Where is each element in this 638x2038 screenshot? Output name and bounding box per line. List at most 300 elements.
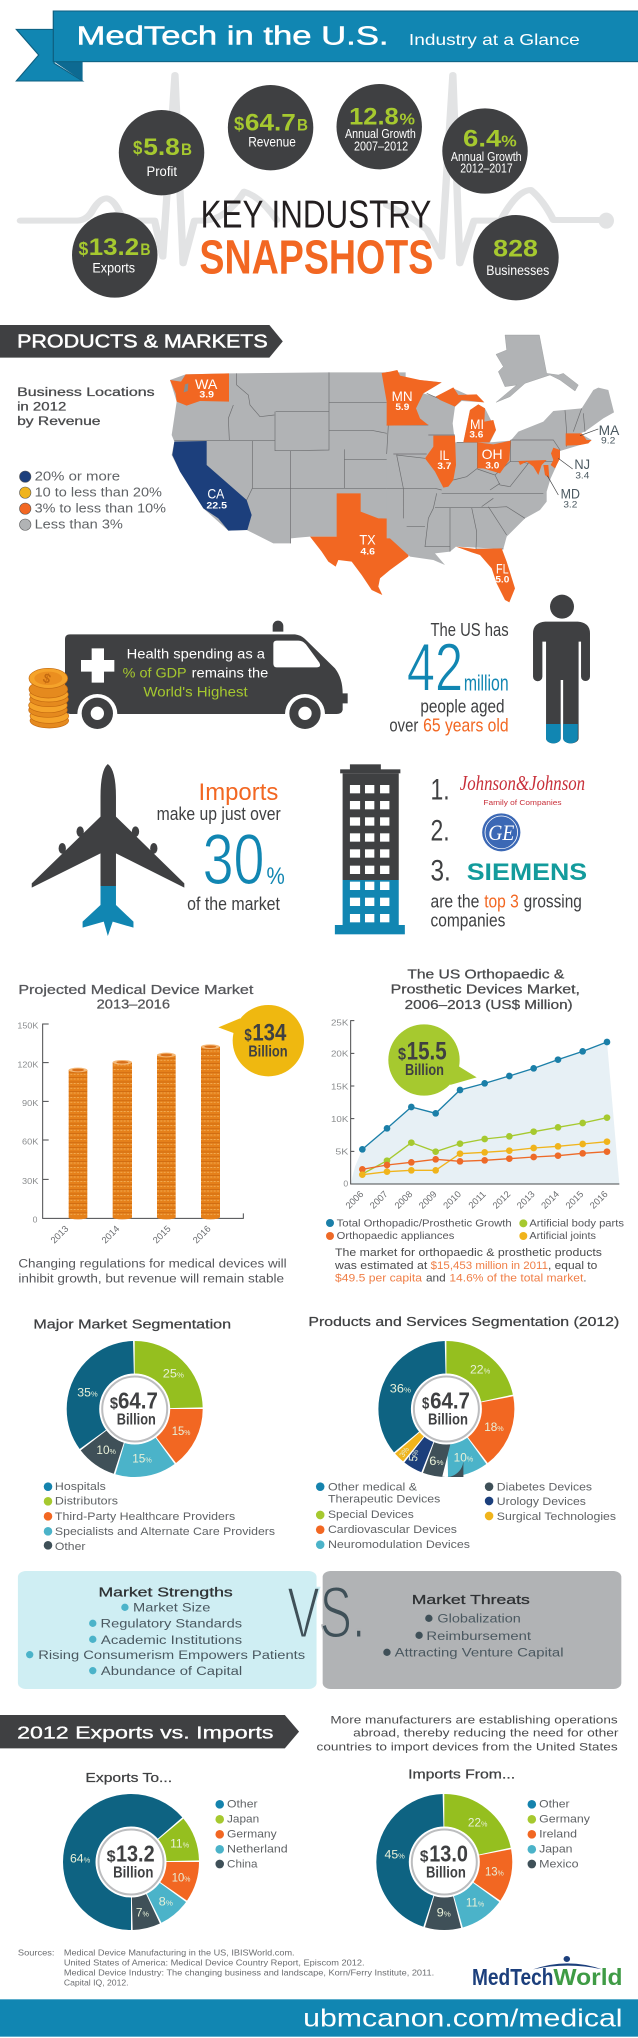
legend: imports	[528, 1798, 590, 1870]
series: artificial joints	[362, 1138, 610, 1175]
callout state labels: MA	[599, 422, 620, 438]
eastern state labels: 5.9	[395, 402, 409, 412]
stat: annual growth 2012-2017: 6.4	[463, 125, 501, 152]
y axis labels: 30K	[22, 1176, 39, 1186]
chart title: Prosthetic Devices Market,	[391, 982, 580, 996]
stat: revenue: B	[297, 115, 308, 134]
state: maryland	[518, 460, 549, 478]
donut: major market segmentation	[84, 1358, 186, 1460]
icon: ambulance with coins	[29, 621, 348, 729]
stat: exports: B	[140, 240, 151, 259]
versus label: S.	[320, 1573, 365, 1653]
percent labels: left donut: 15%	[172, 1424, 190, 1438]
stat: profit	[119, 110, 204, 195]
donut value: left	[110, 1389, 158, 1428]
chart description: The market for orthopaedic & prosthetic products	[335, 1247, 603, 1259]
percent labels: imports donut: 22%	[468, 1816, 487, 1829]
eastern state labels	[392, 388, 509, 585]
sources	[18, 1948, 434, 1987]
chart description	[334, 1247, 603, 1285]
percent labels: imports donut	[385, 1816, 504, 1919]
state: florida	[456, 547, 515, 602]
percent labels: right donut: 22%	[470, 1363, 490, 1376]
percent labels: imports donut: 11%	[466, 1896, 484, 1909]
section heading: PRODUCTS & MARKETS	[17, 332, 268, 352]
eastern state labels: IL	[439, 447, 450, 463]
chart description: and	[426, 1273, 446, 1285]
stat: annual growth 2012-2017: 2012–2017	[460, 161, 513, 175]
eastern state labels: 3.0	[485, 460, 499, 470]
logo: johnson and johnson	[460, 771, 585, 807]
x axis labels: 2009	[417, 1189, 439, 1211]
panel: market strengths: Academic Institutions	[101, 1633, 242, 1647]
map legend: 10 to less than 20%	[35, 485, 162, 499]
fact: imports 30 percent: Imports	[199, 778, 278, 805]
donut value: right: $	[422, 1395, 430, 1412]
callout: 15.5 billion	[388, 1024, 477, 1096]
donut segments	[80, 1811, 182, 1913]
heading: snapshots: SNAPSHOTS	[199, 230, 433, 284]
donut value: exports	[107, 1842, 155, 1881]
x axis labels: 2014	[539, 1189, 561, 1211]
percent labels: exports donut: 8%	[159, 1895, 173, 1908]
y axis labels: 5K	[335, 1147, 349, 1157]
state: texas	[310, 493, 410, 595]
y axis labels	[17, 1021, 39, 1225]
eastern states	[387, 372, 614, 565]
section: infographic facts	[32, 620, 590, 936]
eastern state labels: 3.7	[437, 461, 451, 471]
map legend	[20, 469, 166, 531]
y axis labels: 20K	[331, 1049, 349, 1059]
callout: 134 billion: $	[244, 1026, 252, 1045]
fact: imports 30 percent: 30	[203, 819, 264, 899]
heartbeat end dot	[599, 213, 614, 229]
eastern state labels: FL	[496, 560, 509, 576]
stat: exports: 13.2	[89, 233, 139, 260]
legend: right donut: Surgical Technologies	[497, 1510, 616, 1523]
donut value: right: 64.7	[430, 1389, 470, 1414]
legend: left donut: Third-Party Healthcare Providers	[55, 1510, 235, 1523]
list: top three companies: companies	[430, 911, 505, 931]
chart description: $15,453 million in 2011	[431, 1260, 548, 1272]
state: new jersey	[551, 448, 560, 468]
legend: exports: Germany	[227, 1828, 277, 1840]
percent labels: exports donut: 11%	[170, 1837, 189, 1850]
list: top three companies: 1.	[430, 773, 450, 807]
percent labels: right donut: 6%	[429, 1454, 444, 1468]
section description: abroad, thereby reducing the need for other	[353, 1727, 618, 1739]
x axis labels: 2010	[441, 1189, 463, 1211]
callout state labels: NJ	[574, 456, 590, 472]
legend: right donut: Neuromodulation Devices	[328, 1538, 470, 1551]
map title: in 2012	[17, 400, 66, 413]
eastern state labels: OH	[482, 446, 503, 462]
panel: market threats: Attracting Venture Capital	[395, 1646, 564, 1659]
list: top three companies: 2.	[430, 815, 450, 848]
series: total growth	[359, 1039, 610, 1153]
chart caption: inhibit growth, but revenue will remain stable	[18, 1271, 284, 1285]
section: exports vs imports text	[0, 1713, 638, 2037]
stat: businesses: 828	[493, 235, 538, 262]
callout: 15.5 billion: $	[398, 1044, 407, 1063]
map legend: Less than 3%	[35, 517, 123, 531]
icon: airplane	[32, 764, 184, 936]
stat: revenue	[228, 85, 313, 170]
fact: 42 million seniors: 65 years old	[423, 716, 509, 736]
panel: market threats: Globalization	[437, 1612, 521, 1625]
western state labels: TX	[359, 531, 376, 547]
western state labels: CA	[207, 485, 225, 501]
legend: right donut: Therapeutic Devices	[328, 1493, 440, 1505]
list: top three companies	[430, 773, 582, 931]
percent labels: imports donut: 9%	[437, 1906, 451, 1919]
section description: More manufacturers are establishing operations	[330, 1713, 618, 1726]
banner	[53, 11, 638, 62]
percent labels: right donut: 10%	[454, 1451, 473, 1464]
section: strengths vs threats	[18, 1571, 621, 1689]
chart legend: Artificial joints	[529, 1231, 596, 1242]
x axis labels: 2015	[564, 1189, 585, 1211]
map legend: 20% or more	[35, 469, 120, 483]
legend: left donut: Distributors	[55, 1495, 118, 1507]
eastern state labels: MN	[392, 388, 413, 404]
fact: imports 30 percent	[157, 778, 285, 914]
section banner	[0, 325, 283, 358]
legend: imports: Ireland	[539, 1828, 577, 1840]
stat: annual growth 2012-2017: Annual Growth	[451, 149, 522, 164]
chart title: The US Orthopaedic &	[407, 967, 565, 981]
legend: right donut: Other medical &	[328, 1481, 417, 1493]
stat: profit: Profit	[146, 164, 178, 180]
state: minnesota	[382, 370, 442, 426]
percent labels: exports donut	[70, 1837, 190, 1919]
western state labels: 22.5	[206, 500, 227, 510]
list: top three companies: grossing	[524, 892, 582, 912]
callout state labels: 3.4	[575, 470, 589, 480]
y axis labels: 0	[33, 1215, 38, 1225]
heading: imports from: Imports From...	[408, 1767, 515, 1781]
ambulance text: Health spending as a	[127, 645, 265, 661]
series: orthopaedic appliances	[359, 1148, 610, 1178]
percent labels: right donut: 18%	[484, 1420, 504, 1434]
list: top three companies: top 3	[484, 892, 519, 912]
fact: 42 million seniors: million	[464, 672, 509, 696]
panel: market strengths: Market Strengths	[98, 1586, 233, 1600]
stat: businesses	[473, 215, 559, 300]
title: MedTech in the U.S.	[76, 22, 389, 51]
x axis labels: 2016	[588, 1189, 610, 1211]
legend: exports: Other	[227, 1798, 258, 1810]
stat: profit: B	[181, 140, 192, 159]
chart caption: Changing regulations for medical devices will	[18, 1256, 287, 1270]
medical cross	[81, 648, 114, 683]
chart title: 2006–2013 (US$ Million)	[405, 998, 573, 1012]
legend: right donut: Cardiovascular Devices	[328, 1523, 457, 1536]
legend: exports: China	[227, 1858, 258, 1870]
legend: left donut	[44, 1480, 275, 1553]
percent labels: right donut: 5%	[407, 1449, 422, 1462]
chart legend: Orthopaedic appliances	[337, 1231, 454, 1242]
state: washington	[170, 373, 229, 406]
ambulance body	[65, 634, 348, 714]
panel: market threats: Market Threats	[412, 1593, 530, 1608]
percent labels: right donut: 36%	[390, 1382, 411, 1395]
percent labels: exports donut: 10%	[172, 1871, 190, 1884]
western state labels: WA	[195, 376, 218, 392]
donut center	[96, 1826, 166, 1898]
heading: key industry: KEY INDUSTRY	[201, 194, 431, 237]
state: alaska	[496, 335, 578, 402]
panel: market threats	[323, 1571, 621, 1689]
x axis labels: 2013	[515, 1189, 537, 1211]
chart description: .	[583, 1273, 586, 1285]
y axis labels: 90K	[22, 1098, 39, 1108]
stat: annual growth 2007-2012: %	[400, 111, 415, 128]
state: california	[172, 441, 252, 531]
icon: person	[533, 622, 590, 743]
callout: 134 billion	[218, 1005, 304, 1076]
map: west	[170, 372, 410, 595]
percent labels: imports donut: 45%	[385, 1848, 405, 1861]
section description: countries to import devices from the United States	[317, 1741, 618, 1753]
chart: orthopaedic and prosthetic devices market	[326, 967, 624, 1285]
map title: by Revenue	[17, 414, 101, 428]
chart description: $49.5 per capita	[335, 1273, 423, 1285]
donut value: left: $	[110, 1395, 118, 1412]
series: artificial body parts	[362, 1114, 610, 1174]
panel: market threats: Reimbursement	[426, 1629, 531, 1643]
section description	[317, 1713, 618, 1753]
panel: market strengths	[18, 1571, 317, 1689]
ribbon fold	[54, 62, 83, 81]
donut segments	[395, 1358, 497, 1460]
callout: 134 billion: 134	[252, 1020, 287, 1047]
axes	[351, 1021, 619, 1184]
callout state labels: 3.2	[563, 500, 577, 510]
chart title: Projected Medical Device Market	[18, 983, 254, 997]
donut: exports	[80, 1811, 182, 1913]
y axis labels: 15K	[331, 1081, 349, 1091]
section: segmentation text	[33, 1314, 619, 1553]
sources: Medical Device Manufacturing in the US, IBISWorld.com.	[64, 1948, 295, 1957]
section heading: 2012 Exports vs. Imports	[17, 1723, 273, 1743]
section banner	[0, 1715, 299, 1748]
x axis labels: 2006	[344, 1189, 365, 1211]
logo: medtechworld	[472, 1956, 623, 1990]
stat: exports: $	[79, 239, 89, 259]
eastern state labels: MI	[470, 416, 484, 432]
chart caption	[18, 1256, 287, 1285]
stat: revenue: 64.7	[245, 109, 296, 136]
x axis labels: 2011	[467, 1189, 488, 1211]
legend: left donut: Hospitals	[55, 1480, 106, 1493]
coin bars	[69, 1044, 220, 1219]
fact: 42 million seniors: over	[389, 716, 418, 736]
heading: products and services: Products and Services Segmentation (2012)	[308, 1314, 619, 1329]
axes	[43, 1024, 243, 1218]
panel: market strengths: Abundance of Capital	[101, 1664, 242, 1678]
map: east and alaska	[382, 335, 620, 619]
donut segments	[84, 1358, 186, 1460]
donut value: exports: Billion	[113, 1864, 153, 1881]
ambulance text: World's Highest	[143, 684, 248, 700]
chart description: was estimated at	[334, 1260, 427, 1272]
donut value: left: Billion	[117, 1411, 156, 1428]
donut center	[411, 1374, 482, 1444]
callout: 15.5 billion: 15.5	[407, 1038, 447, 1065]
eastern state borders	[387, 393, 585, 552]
chart title	[18, 983, 254, 1012]
x axis labels: 2012	[491, 1189, 512, 1211]
y axis labels: 150K	[17, 1021, 39, 1031]
callout state labels: MD	[561, 485, 580, 501]
state: massachusetts	[566, 433, 592, 446]
ambulance light	[273, 621, 283, 632]
ribbon tail	[16, 29, 83, 81]
legend: right donut: Urology Devices	[497, 1495, 586, 1508]
y axis labels: 0	[343, 1179, 348, 1189]
stat: annual growth 2007-2012: 2007–2012	[354, 139, 408, 153]
sources: Sources:	[18, 1948, 55, 1957]
fact: 42 million seniors	[389, 620, 509, 736]
donut value: imports: Billion	[426, 1864, 466, 1881]
chart legend: Artificial body parts	[529, 1219, 624, 1230]
stat: revenue: Revenue	[248, 135, 296, 150]
subtitle: Industry at a Glance	[409, 32, 580, 49]
icon: person head	[550, 595, 574, 619]
legend: right donut: Special Devices	[328, 1508, 414, 1521]
ambulance text: remains the	[192, 664, 269, 680]
icon: office building	[335, 764, 405, 934]
sources: Medical Device Industry: The changing business and landscape, Korn/Ferry Institute, 2011.	[64, 1968, 434, 1977]
legend: imports: Germany	[539, 1813, 590, 1825]
legend: exports	[215, 1798, 288, 1870]
legend: imports: Other	[539, 1798, 570, 1810]
percent labels: left donut: 25%	[163, 1367, 184, 1380]
logo: GE	[482, 813, 520, 851]
western state labels	[195, 376, 376, 556]
stat: annual growth 2012-2017	[442, 108, 528, 194]
western state labels: 4.6	[360, 546, 375, 556]
legend: imports: Japan	[539, 1843, 572, 1855]
legend: right donut: Diabetes Devices	[497, 1481, 592, 1493]
stat: exports: Exports	[92, 261, 135, 276]
puget sound	[184, 383, 188, 392]
legend: exports: Japan	[227, 1813, 259, 1825]
x axis labels: 2015	[151, 1224, 173, 1245]
x axis labels: 2013	[49, 1224, 70, 1245]
donut: products and services segmentation	[395, 1358, 497, 1460]
x axis labels	[344, 1189, 610, 1211]
y axis labels: 10K	[331, 1114, 349, 1124]
donut value: imports: 13.0	[429, 1842, 468, 1867]
percent labels: right donut	[390, 1363, 504, 1468]
y axis labels: 60K	[22, 1137, 39, 1147]
percent labels: left donut: 35%	[77, 1386, 98, 1399]
chart title	[391, 967, 580, 1012]
chart description: 14.6% of the total market	[449, 1273, 583, 1285]
chart legend	[326, 1219, 624, 1242]
ambulance wheels	[82, 698, 321, 729]
callout state labels	[561, 422, 620, 510]
area under total line	[351, 1042, 619, 1184]
y axis labels: 120K	[17, 1059, 39, 1069]
icon: coin stack: $	[41, 670, 54, 687]
section: header and key snapshots	[16, 11, 638, 300]
versus label: V	[287, 1573, 320, 1653]
ambulance window	[273, 641, 320, 667]
footer url: ubmcanon.com/medical	[303, 2003, 623, 2032]
callout state labels: 9.2	[601, 436, 615, 446]
percent labels: imports donut: 13%	[485, 1865, 504, 1878]
x axis labels: 2008	[393, 1189, 414, 1211]
logo: medtechworld: MedTech	[472, 1963, 553, 1990]
sources: United States of America: Medical Device Country Report, Episcom 2012.	[64, 1958, 365, 1967]
stat: profit: $	[133, 138, 143, 158]
stat: annual growth 2007-2012: Annual Growth	[345, 126, 416, 141]
heading: exports to: Exports To...	[85, 1770, 172, 1785]
eastern state labels: 3.6	[469, 430, 483, 440]
donut value: exports: $	[107, 1848, 116, 1865]
logo: medtechworld: World	[553, 1963, 623, 1990]
chart: projected medical device market	[17, 983, 304, 1285]
eastern state labels: 5.0	[495, 575, 509, 585]
stat: businesses: Businesses	[486, 263, 549, 279]
map title: Business Locations	[17, 385, 155, 399]
percent labels: left donut: 15%	[132, 1452, 152, 1465]
percent labels: left donut	[77, 1367, 190, 1465]
logo: GE: GE	[488, 821, 514, 845]
legend: left donut: Other	[55, 1540, 85, 1553]
list: top three companies: are the	[430, 892, 479, 912]
legend: exports: Netherland	[227, 1843, 288, 1855]
panel: market strengths: Market Size	[133, 1601, 211, 1614]
stat: revenue: $	[234, 114, 245, 134]
fact: imports 30 percent: make up just over	[157, 804, 281, 824]
percent labels: exports donut: 64%	[70, 1852, 90, 1865]
donut center	[409, 1826, 480, 1898]
panel: market strengths: Rising Consumerism Empowers Patients	[38, 1648, 305, 1662]
state: ohio	[477, 441, 511, 473]
y axis labels: 25K	[331, 1017, 349, 1027]
stat: annual growth 2007-2012: 12.8	[349, 103, 399, 130]
panel: market strengths: Regulatory Standards	[101, 1617, 242, 1630]
western state borders	[174, 372, 406, 543]
footer bar	[0, 1999, 638, 2037]
percent labels: exports donut: 7%	[136, 1906, 149, 1919]
donut: imports	[393, 1811, 495, 1913]
fact: imports 30 percent: %	[267, 862, 285, 889]
stat: annual growth 2012-2017: %	[501, 133, 517, 150]
y axis labels	[331, 1017, 349, 1189]
ambulance text	[123, 645, 269, 700]
percent labels: right donut: 3%	[397, 1446, 412, 1458]
fact: 42 million seniors: The US has	[430, 620, 509, 640]
callout: 15.5 billion: Billion	[405, 1062, 444, 1079]
section: products and markets	[0, 325, 283, 531]
logo: johnson and johnson: Family of Companies	[483, 799, 562, 807]
donut center	[99, 1374, 170, 1444]
donut value: right	[422, 1389, 470, 1428]
donut value: imports	[420, 1842, 468, 1881]
legend: right donut	[316, 1481, 616, 1551]
stat: exports	[72, 212, 157, 298]
chart legend: Total Orthopadic/Prosthetic Growth	[337, 1219, 512, 1230]
x axis labels: 2014	[100, 1224, 121, 1245]
x axis labels: 2007	[368, 1189, 390, 1211]
leader lines	[547, 429, 598, 495]
